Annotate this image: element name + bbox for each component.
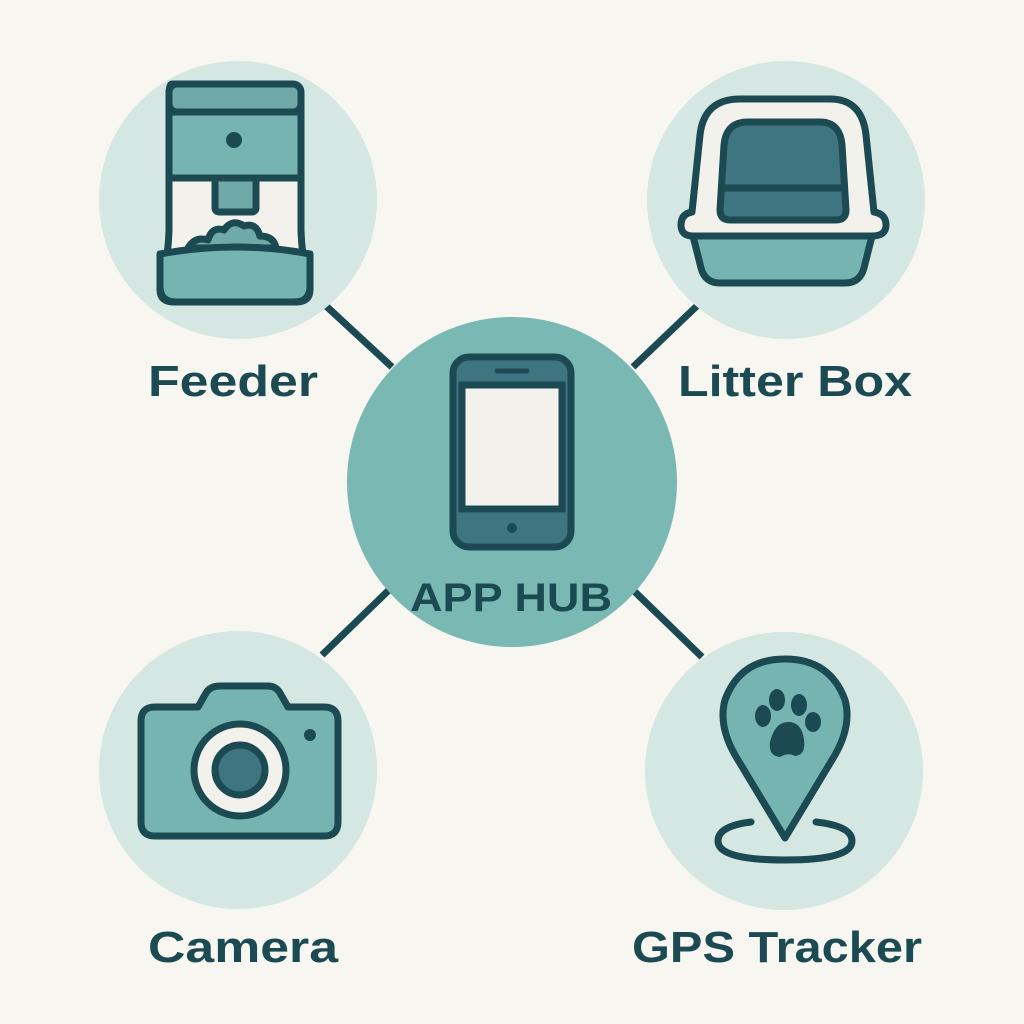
panel: GPS tracker (632, 632, 923, 972)
panel: app hub (347, 317, 677, 647)
icon: litter box (681, 99, 886, 283)
connector lines (322, 303, 702, 657)
label: GPS Tracker: GPS Tracker (632, 923, 922, 972)
label: Litter Box: Litter Box (678, 357, 913, 406)
panel: litter box (647, 61, 925, 406)
label: Feeder: Feeder (148, 357, 318, 406)
label: Camera: Camera (148, 923, 339, 972)
icon: feeder (160, 84, 310, 302)
icon: camera (141, 686, 338, 836)
icon: GPS pin (718, 659, 852, 860)
icon: phone (453, 357, 571, 547)
panel: feeder (99, 61, 377, 406)
label: APP HUB: APP HUB (410, 576, 612, 620)
panel: camera (99, 631, 377, 972)
